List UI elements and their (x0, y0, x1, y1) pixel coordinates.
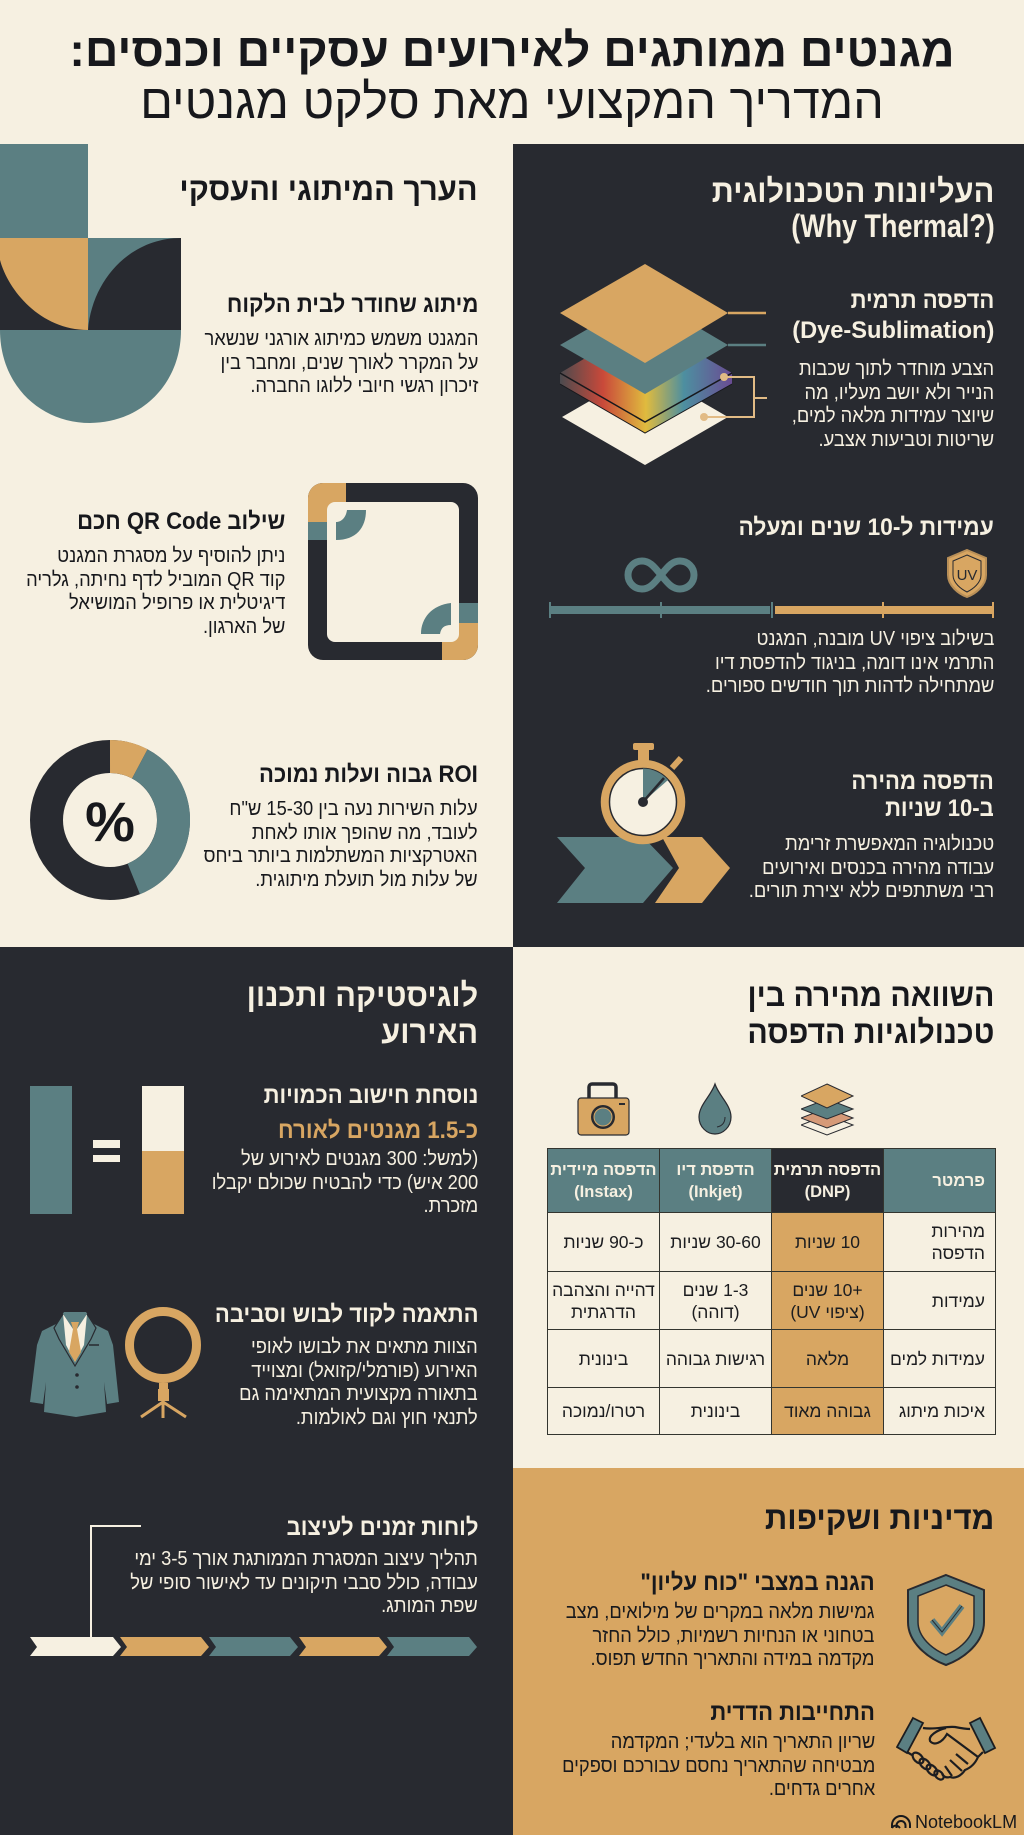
body text: quantity example: (למשל: 300 מגנטים לאירוע של (241, 1148, 478, 1170)
panel: quick comparison of printing technologies (547, 977, 996, 1435)
heading: why thermal (711, 173, 994, 244)
text block: fast print heading: ב-10 שניות (885, 795, 994, 822)
icon: handshake (896, 1716, 996, 1781)
body text: ROI: האטרקציות המשתלמות ביותר ביחס (204, 845, 478, 867)
body text: organic branding: המגנט משמש כמיתוג אורגני שנשאר (204, 328, 478, 350)
table: technology comparison: (דוהה) (691, 1302, 740, 1322)
body text: durability: התרמי אינו דומה, בניגוד להדפסת דיו (715, 652, 994, 674)
icon: UV shield (947, 549, 987, 598)
body text: dress code: בתאורה מקצועית המתאימה גם (239, 1383, 478, 1405)
text block: dye sublimation heading: הדפסה תרמית (850, 287, 994, 314)
panel: brand and business value (0, 144, 478, 900)
title: המדריך המקצועי מאת סלקט מגנטים (140, 75, 884, 129)
body text: dress code: האירוע (פורמלי/קזואל) ומצוייד (252, 1360, 478, 1382)
table: technology comparison: מלאה (806, 1348, 849, 1368)
text block: dye sublimation heading: (Dye-Sublimation) (792, 317, 994, 344)
body text: fast print: טכנולוגיה המאפשרת זרימת (785, 833, 994, 855)
body text: mutual commitment: מבטיחה שהתאריך נחסם עבורכם וספקים (562, 1754, 875, 1776)
title (69, 24, 955, 129)
table: technology comparison: גבוהה מאוד (784, 1401, 871, 1421)
table: technology comparison: (Inkjet) (688, 1182, 743, 1200)
body text: QR code: של הארגון. (203, 616, 285, 638)
body text: dye sublimation: שיוצר עמידות מלאה למים, (792, 405, 994, 427)
table: technology comparison: (ציפוי UV) (790, 1302, 865, 1322)
icon: infinity symbol (624, 558, 698, 592)
body text: dye sublimation: הנייר ולא יושב מעליו, מה (804, 382, 994, 404)
table: technology comparison: כ-90 שניות (563, 1232, 644, 1252)
icon: instant camera (577, 1082, 630, 1136)
text block: design timeline heading: לוחות זמנים לעיצוב (286, 1514, 478, 1541)
table: technology comparison: עמידות (932, 1290, 985, 1310)
chart: durability timeline bar (549, 602, 994, 618)
heading: brand value: הערך המיתוגי והעסקי (180, 171, 478, 207)
body text: organic branding: על המקרר לאורך שנים, ומחבר בין (220, 352, 478, 374)
body text: force majeure: גמישות מלאה במקרים של מילואים, מצב (566, 1601, 875, 1623)
text block: brand at the customer's home: מיתוג שחודר לבית הלקוח (226, 291, 478, 318)
chart: five-step timeline chevrons with bracket (30, 1525, 477, 1656)
icon: layered dye-sublimation diagram (560, 264, 767, 465)
text block: fast print heading: הדפסה מהירה (852, 768, 994, 795)
table: technology comparison: רטרו/נמוכה (562, 1401, 645, 1421)
body text: force majeure (566, 1601, 875, 1670)
table: technology comparison: הדפסה (932, 1243, 985, 1263)
body text: ROI: של עלות מול תועלת מיתוגית. (256, 868, 478, 890)
table: technology comparison: 30-60 שניות (670, 1232, 761, 1252)
callout: magnets per guest: כ-1.5 מגנטים לאורח (278, 1117, 478, 1144)
title: מגנטים ממותגים לאירועים עסקיים וכנסים: (69, 24, 955, 76)
body text: durability (705, 628, 994, 697)
body text: force majeure: בטחוני או הנחיות רשמיות, כולל החזר (593, 1624, 875, 1646)
heading: logistics: לוגיסטיקה ותכנון (246, 977, 478, 1013)
body text: durability: בשילוב ציפוי UV מובנה, המגנט (756, 628, 994, 650)
icon: quantity formula blocks (30, 1086, 184, 1214)
chart: donut with percent sign (30, 740, 190, 900)
text block: ROI heading: ROI גבוה ועלות נמוכה (259, 761, 478, 788)
body text: QR code: דיגיטלית או פרופיל המושיאל (69, 592, 285, 614)
table: technology comparison: 10 שניות (795, 1232, 860, 1252)
table: technology comparison: הדפסת דיו (676, 1160, 755, 1178)
body text: ROI: לעובד, מה שהופך אותו לאחת (252, 822, 478, 844)
table: technology comparison (547, 1148, 996, 1435)
body text: quantity example (212, 1148, 478, 1217)
table: technology comparison: איכות מיתוג (899, 1401, 985, 1421)
heading: why thermal: (Why Thermal?) (790, 208, 994, 244)
text block: dress code heading: התאמה לקוד לבוש וסביבה (214, 1301, 478, 1328)
body text: QR code: קוד QR המוביל לדף נחיתה, גלריה (26, 568, 285, 590)
chart: donut with percent sign: % (85, 790, 135, 853)
body text: design timeline: עבודה, כולל סבבי תיקונים עד לאישור סופי של (131, 1572, 478, 1594)
logo: NotebookLM: NotebookLM (915, 1812, 1017, 1832)
table: technology comparison: הדרגתית (571, 1302, 636, 1322)
body text: mutual commitment: שריון התאריך הוא בלעדי; המקדמה (610, 1731, 875, 1753)
table: technology comparison: הדפסה מיידית (550, 1160, 657, 1178)
icon: stacked layers (801, 1084, 854, 1136)
body text: organic branding (204, 328, 478, 397)
table: technology comparison: 1-3 שנים (683, 1280, 748, 1300)
heading: policy: מדיניות ושקיפות (765, 1500, 994, 1536)
body text: dress code: הצוות מתאים את לבושו לאופי (251, 1336, 478, 1358)
table: technology comparison: רגישות גבוהה (666, 1348, 765, 1368)
body text: design timeline: שפת המותג. (381, 1595, 478, 1617)
body text: QR code: ניתן להוסיף על מסגרת המגנט (57, 545, 285, 567)
panel: logistics and event planning (0, 947, 513, 1835)
text block: mutual commitment heading: התחייבות הדדית (710, 1699, 875, 1726)
table: technology comparison: בינונית (579, 1348, 628, 1368)
body text: force majeure: מקדמה במידה והתאריך החדש תפוס. (591, 1648, 875, 1670)
heading: comparison (747, 977, 994, 1050)
body text: fast print (749, 833, 994, 902)
heading: comparison: השוואה מהירה בין (747, 977, 994, 1013)
icon: abstract geometric shapes (0, 144, 181, 423)
heading: logistics (246, 977, 478, 1050)
body text: quantity example: מזכרת. (423, 1195, 478, 1217)
body text: fast print: רבי משתתפים ללא יצירת תורים. (749, 880, 994, 902)
table: technology comparison: (DNP) (805, 1182, 850, 1200)
icon: stopwatch over arrows (557, 743, 730, 903)
body text: ROI (204, 798, 478, 890)
body text: dye sublimation: הצבע מוחדר לתוך שכבות (799, 358, 994, 380)
body text: fast print: עבודה מהירה בכנסים ואירועים (762, 856, 994, 878)
body text: dye sublimation (792, 358, 994, 450)
body text: durability: שמתחילה לדהות תוך חודשים ספורים. (705, 675, 994, 697)
heading: why thermal: העליונות הטכנולוגית (711, 173, 994, 209)
heading: comparison: טכנולוגיות הדפסה (747, 1014, 994, 1050)
body text: mutual commitment: אחרים גדחים. (769, 1778, 875, 1800)
body text: design timeline: תהליך עיצוב המסגרת הממותגת אורך 3-5 ימי (135, 1548, 478, 1570)
text block: force majeure heading: הגנה במצבי "כוח עליון" (641, 1569, 875, 1596)
panel: technological superiority (513, 144, 1024, 947)
table: technology comparison: מהירות (931, 1221, 985, 1241)
icon: ring light on a tripod (125, 1307, 201, 1418)
table: technology comparison: (Instax) (574, 1182, 633, 1200)
table: technology comparison: דהייה והצהבה (552, 1280, 655, 1300)
body text: dye sublimation: שריטות וטביעות אצבע. (818, 428, 994, 450)
body text: mutual commitment (562, 1731, 875, 1800)
body text: quantity example: 200 איש) כדי להבטיח שכולם יקבלו (212, 1172, 478, 1194)
body text: design timeline (130, 1548, 478, 1617)
table: technology comparison: עמידות למים (890, 1348, 985, 1368)
body text: QR code (26, 545, 285, 638)
icon: magnet frame with QR corners (308, 483, 478, 660)
panel: policy and transparency (513, 1468, 1024, 1835)
body text: dress code: לתנאי חוץ וגם לאולמות. (296, 1406, 478, 1428)
text block: QR code heading: שילוב QR Code חכם (77, 508, 285, 535)
text block: fast print heading (852, 768, 994, 822)
icon: UV shield: UV (957, 567, 977, 584)
icon: shield with check mark (907, 1574, 985, 1666)
text block: dye sublimation heading (792, 287, 994, 344)
table: technology comparison: +10 שנים (792, 1280, 863, 1300)
body text: dress code (239, 1336, 478, 1428)
text block: quantity formula heading: נוסחת חישוב הכמויות (263, 1082, 478, 1109)
text block: durability heading: עמידות ל-10 שנים ומעלה (739, 514, 994, 541)
table: technology comparison: הדפסה תרמית (774, 1160, 881, 1178)
table: technology comparison: פרמטר (932, 1172, 985, 1190)
icon: suit jacket (30, 1312, 119, 1417)
body text: ROI: עלות השירות נעה בין 15-30 ש"ח (230, 798, 478, 820)
icon: ink drop (698, 1082, 732, 1135)
heading: logistics: האירוע (381, 1014, 478, 1050)
body text: organic branding: זיכרון רגשי חיובי ללוגו החברה. (250, 375, 478, 397)
table: technology comparison: בינונית (691, 1401, 740, 1421)
